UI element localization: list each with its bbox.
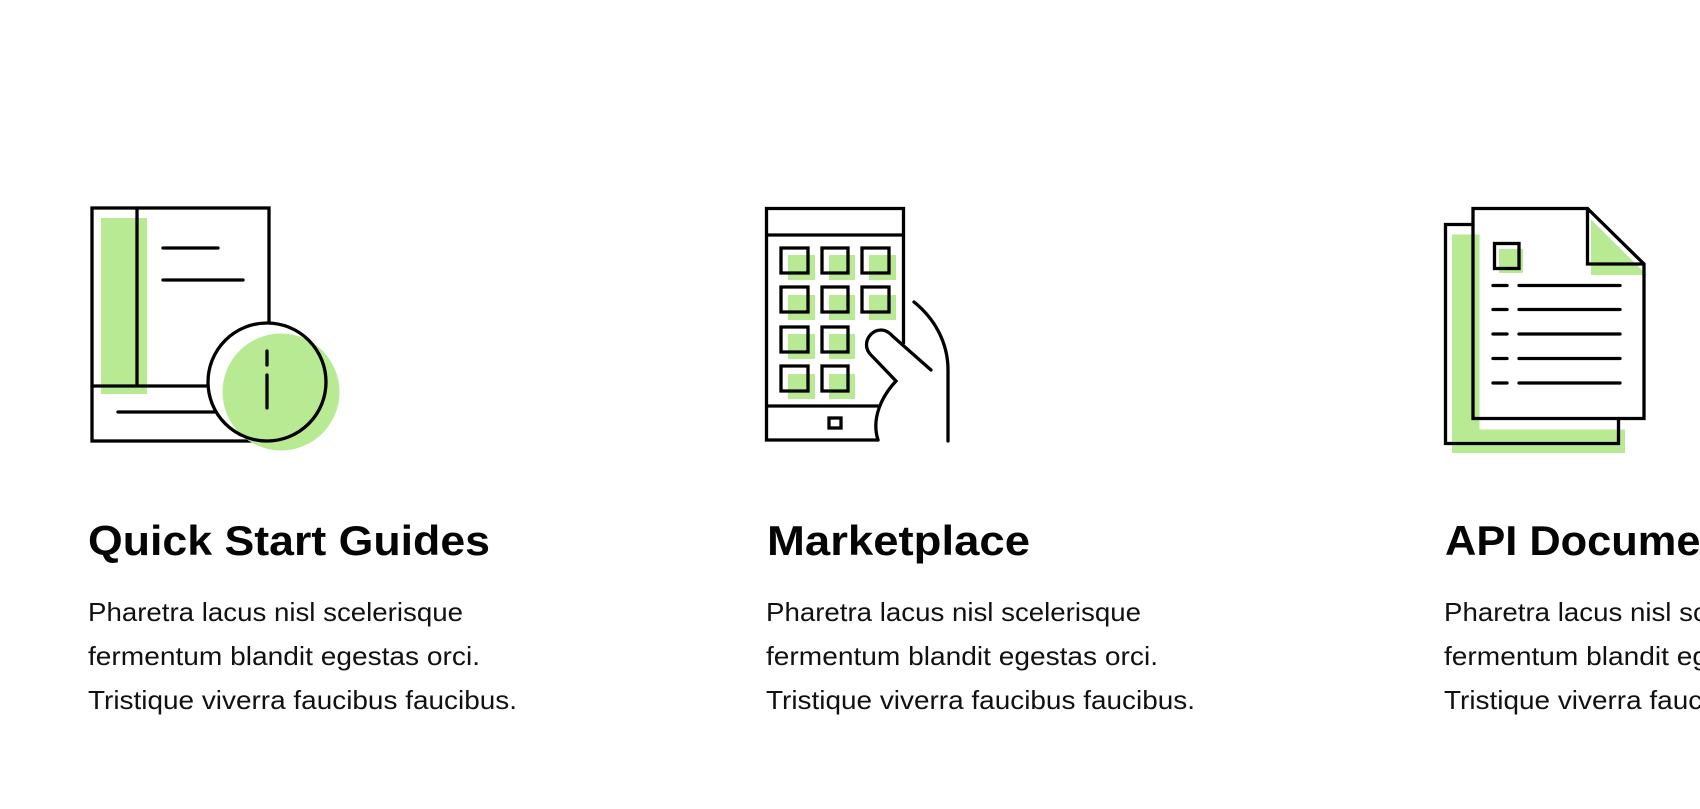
- text: quick start description: Pharetra lacus nisl scelerisque: [88, 597, 463, 627]
- icon: stacked documents: [1446, 208, 1647, 453]
- panel: marketplace: [766, 208, 1195, 715]
- text: quick start description: Tristique viverra faucibus faucibus.: [88, 685, 517, 715]
- text: api documentation description: [1444, 597, 1700, 715]
- text: quick start description: [88, 597, 517, 715]
- panel: quick start guides: [88, 208, 517, 715]
- text: marketplace description: Pharetra lacus nisl scelerisque: [766, 597, 1141, 627]
- icon: phone with app grid and hand: [766, 208, 948, 441]
- text: quick start description: fermentum blandit egestas orci.: [88, 641, 480, 671]
- heading: quick start guides: Quick Start Guides: [88, 517, 490, 564]
- text: marketplace description: [766, 597, 1195, 715]
- icon: book with info badge: [92, 208, 340, 450]
- text: marketplace description: Tristique viverra faucibus faucibus.: [766, 685, 1195, 715]
- text: marketplace description: fermentum blandit egestas orci.: [766, 641, 1158, 671]
- heading: marketplace: Marketplace: [767, 517, 1030, 564]
- panel: api documentation: [1444, 208, 1700, 715]
